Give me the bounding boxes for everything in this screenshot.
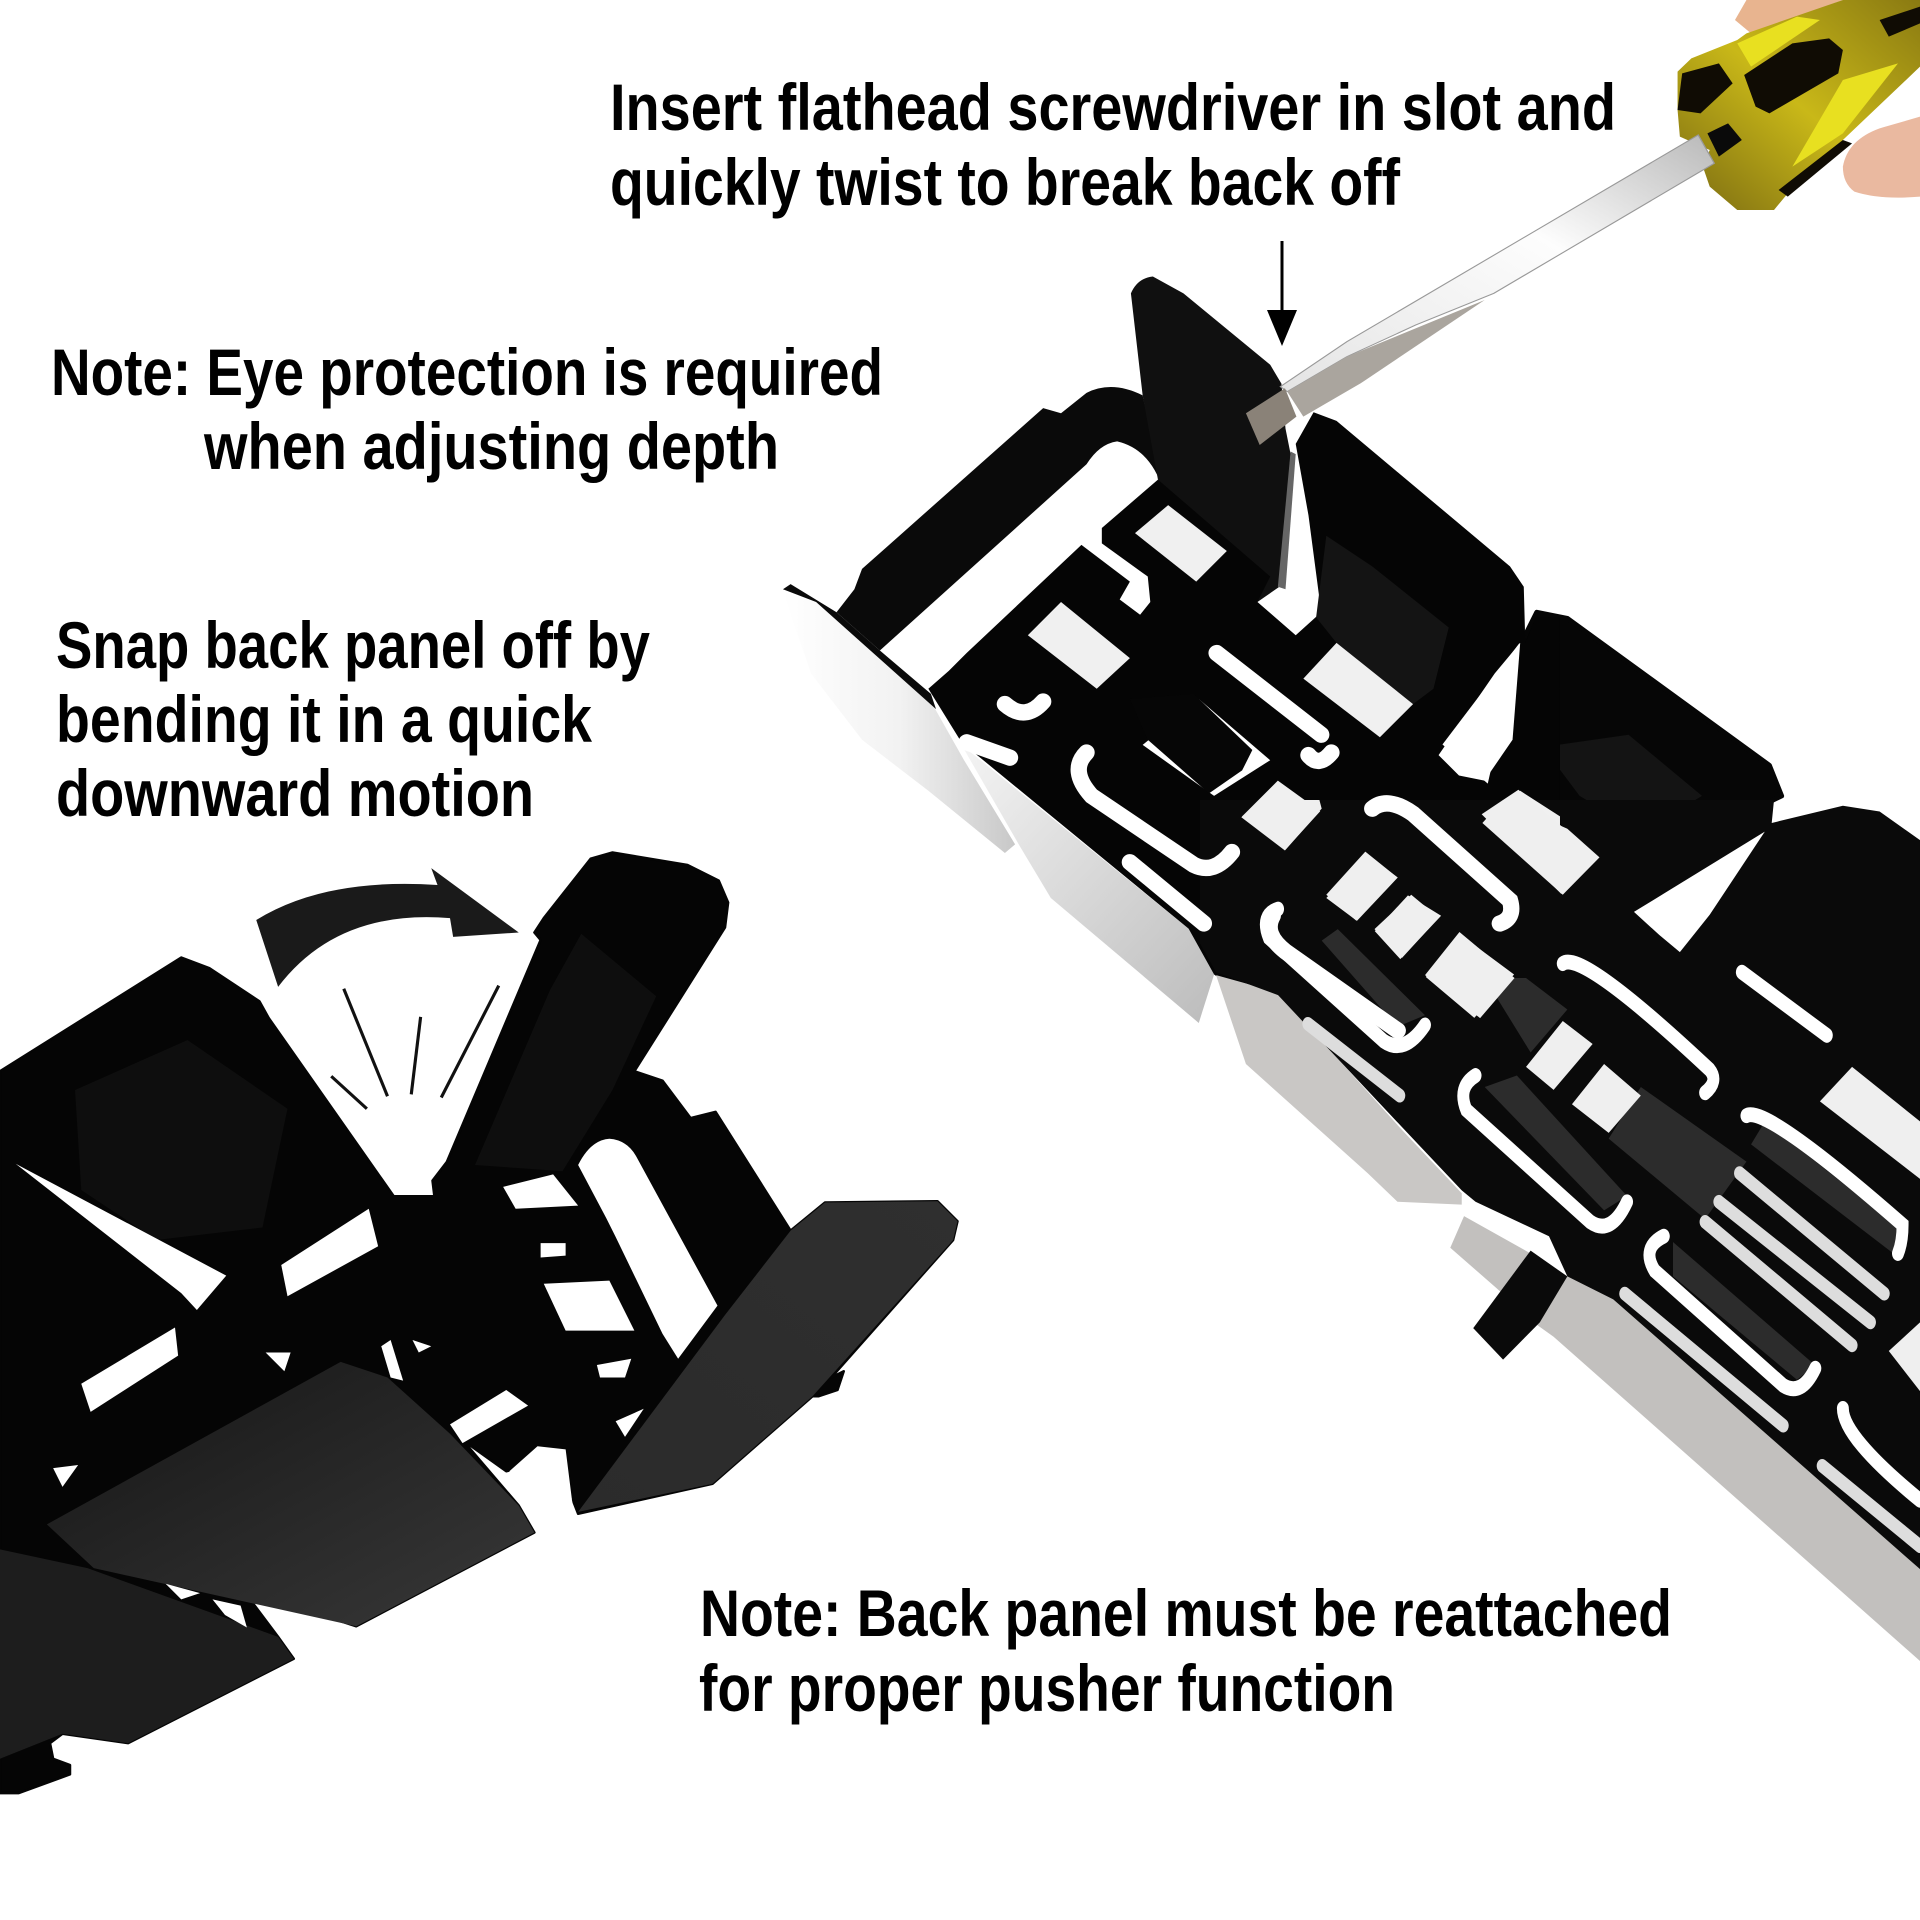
side rail — [837, 387, 1163, 651]
text: eye protection note: when adjusting depth — [203, 409, 779, 483]
white wedge gap — [16, 1164, 226, 1310]
shaft — [1280, 135, 1714, 392]
right tray: upper right openings — [1442, 643, 1598, 894]
text: reattach note — [699, 1576, 1672, 1725]
left tray: product photo — [0, 852, 958, 1793]
front panel two — [962, 745, 1214, 1023]
text: screwdriver instruction: quickly twist to break back off — [610, 145, 1401, 219]
text: reattach note: for proper pusher function — [699, 1651, 1395, 1725]
long lower side panel — [1450, 1216, 1920, 1661]
panel shading — [475, 934, 656, 1171]
right tray: product photo — [783, 277, 1920, 1661]
channels and slats — [1266, 909, 1920, 1500]
mounting bolt — [812, 654, 836, 678]
white gap triangle — [1442, 643, 1520, 784]
ridged blade flat — [1287, 300, 1485, 417]
notch tab — [1130, 694, 1252, 793]
screwdriver and hand — [1246, 0, 1920, 445]
channel cutouts — [967, 653, 1511, 1031]
text: snap back panel instruction: downward motion — [56, 756, 534, 830]
right tray: upper section solids — [783, 277, 1560, 1050]
base band — [928, 412, 1560, 1050]
handle — [1678, 0, 1920, 210]
openings — [1241, 800, 1920, 1391]
panel edge — [1278, 452, 1296, 589]
text: snap back panel instruction — [56, 608, 650, 830]
finger — [1735, 0, 1843, 33]
front centre panel — [47, 1362, 534, 1626]
arrow: pointing to slot — [1267, 241, 1297, 346]
text: snap back panel instruction: Snap back panel off by — [56, 608, 650, 682]
text: eye protection note — [51, 335, 883, 483]
text: screwdriver instruction: Insert flathead screwdriver in slot and — [610, 70, 1616, 144]
tray silhouette — [0, 852, 958, 1793]
grey slots — [1308, 1024, 1920, 1546]
tall back panel being broken off — [1131, 277, 1291, 602]
thumb — [1843, 117, 1920, 198]
handle dark recesses — [1678, 7, 1920, 197]
black clip — [1473, 1251, 1567, 1360]
curved motion arrow — [256, 868, 519, 987]
handle highlights — [1737, 17, 1898, 167]
front panel one — [783, 592, 1015, 853]
text: eye protection note: Note: Eye protection is required — [51, 335, 883, 409]
white gap triangle — [1634, 832, 1765, 952]
text: snap back panel instruction: bending it in a quick — [56, 682, 592, 756]
back panel shading — [75, 1040, 288, 1240]
blade tip — [1246, 388, 1296, 445]
right tray: lower section cutouts — [1241, 800, 1920, 1546]
snap impact lines — [331, 986, 499, 1109]
lower front panel — [1216, 975, 1462, 1205]
front right panel — [578, 1201, 958, 1512]
white gap triangle — [1439, 643, 1520, 781]
right tray: lower section solids — [1200, 800, 1920, 1661]
text: screwdriver instruction — [610, 70, 1616, 219]
right tray: upper section cutouts — [967, 505, 1560, 1031]
tray openings — [53, 1139, 718, 1628]
shaft collar — [1707, 123, 1742, 157]
opening — [1482, 790, 1598, 894]
panel top edge — [783, 584, 936, 709]
square openings — [1028, 505, 1560, 1018]
notch window — [1143, 699, 1270, 796]
band — [1200, 800, 1920, 1569]
panel shading — [1316, 536, 1449, 704]
front left panel — [0, 1549, 294, 1759]
text: reattach note: Note: Back panel must be reattached — [700, 1576, 1672, 1650]
right tray: upper back panel section — [1469, 612, 1782, 833]
textured plates — [1322, 929, 1903, 1380]
